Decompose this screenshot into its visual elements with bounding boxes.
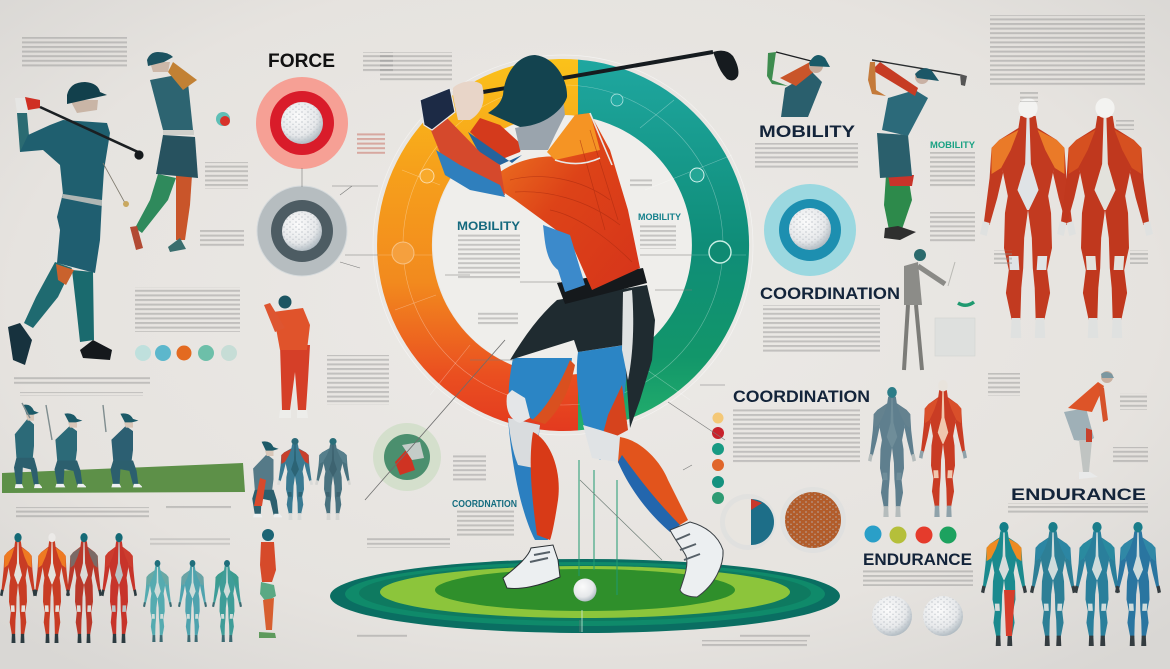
endurance figure two (1030, 522, 1076, 646)
heading: force: FORCE (268, 51, 335, 72)
legs (884, 175, 912, 235)
arm (264, 303, 285, 332)
rear arm blue muscle (468, 132, 522, 165)
second golfer top left (130, 52, 198, 252)
connector lines (302, 168, 725, 632)
head (150, 62, 170, 72)
club (872, 60, 960, 75)
muscle striations (510, 130, 632, 262)
white golf balls (872, 596, 963, 636)
club lines (22, 403, 106, 440)
anatomy back view right (1057, 98, 1153, 338)
heading: mobility: MOBILITY (759, 122, 856, 141)
mobility golfer two (868, 60, 967, 240)
hand (453, 81, 484, 120)
legs (280, 345, 310, 410)
right leg (577, 345, 688, 532)
head (809, 59, 823, 73)
cap (67, 82, 107, 104)
club head (713, 51, 738, 80)
figure four (101, 533, 137, 643)
ring arc: orange to red (377, 59, 578, 431)
golfer two (54, 413, 87, 487)
white glove (15, 98, 28, 113)
ring arc: teal to green (578, 60, 749, 430)
shorts (156, 135, 198, 178)
heading: endurance upper: ENDURANCE (1011, 485, 1146, 504)
head (70, 100, 98, 113)
head (278, 296, 292, 308)
abdominal muscles (543, 225, 585, 292)
green accent (958, 302, 974, 305)
arms (767, 52, 788, 86)
shoulder highlight (547, 113, 600, 160)
cap (915, 68, 939, 81)
textured brown ball (780, 487, 846, 553)
forearm (780, 62, 816, 86)
figure three (315, 438, 351, 520)
wrist wrap (420, 88, 455, 130)
alignment lines (579, 460, 662, 595)
club (483, 52, 713, 92)
label: mobility right: MOBILITY (930, 140, 975, 150)
red anatomy front figure (919, 380, 967, 517)
torso (882, 90, 928, 136)
ball marker (123, 201, 129, 207)
figure three (212, 560, 242, 642)
muscle accent (888, 175, 914, 186)
arm orange (868, 62, 886, 96)
shorts (877, 133, 912, 178)
right leg (176, 175, 192, 240)
belt (62, 193, 102, 206)
coordination dots (712, 412, 724, 504)
figure two (277, 438, 313, 520)
cap (914, 249, 926, 261)
mobility target blue (764, 184, 856, 276)
swing path (103, 163, 125, 203)
force target grey (257, 186, 347, 276)
figure two (34, 533, 70, 643)
cap (147, 52, 173, 66)
shoes (279, 410, 308, 418)
three golfers on turf (2, 403, 245, 493)
ring node left (392, 242, 414, 264)
white collar lines (555, 113, 612, 165)
central progress ring (373, 55, 753, 435)
torso (273, 308, 310, 350)
right shoe (168, 238, 186, 252)
torso (260, 542, 276, 582)
club (776, 52, 815, 62)
label: mobility ring: MOBILITY (638, 212, 681, 222)
large golfer follow through (8, 82, 144, 365)
cap (809, 55, 830, 67)
endurance figure multi-colour (981, 522, 1027, 646)
muscle accent (56, 264, 74, 285)
shoe (259, 632, 276, 638)
left leg (135, 174, 176, 233)
rear arm (470, 118, 522, 160)
head (1101, 371, 1113, 383)
figure three (66, 533, 102, 643)
club head (134, 150, 144, 160)
connector through target (365, 340, 505, 500)
ring node upper left (420, 169, 434, 183)
shoe laces (530, 534, 700, 562)
red bent golfer (264, 296, 310, 418)
heading: coordination lower: COORDINATION (733, 387, 870, 406)
figure two (178, 560, 207, 642)
left leg (24, 262, 72, 328)
golfer one (14, 405, 43, 488)
ring node right (709, 241, 731, 263)
anatomy row orange (0, 533, 137, 643)
headings (452, 122, 1146, 569)
shorts (260, 582, 276, 602)
grey figure (868, 387, 916, 517)
torso (904, 262, 922, 305)
right shoe (670, 522, 723, 597)
belt (557, 268, 647, 304)
skeleton golfer (904, 249, 955, 370)
red knee (1086, 428, 1092, 442)
ring node upper right (690, 168, 704, 182)
small red and teal icon (216, 112, 230, 126)
left leg (507, 358, 575, 540)
right leg (72, 270, 94, 342)
right bent golfer (1064, 371, 1114, 479)
club head (960, 74, 967, 86)
lower leg (1079, 440, 1092, 472)
shoe (1079, 472, 1098, 479)
endurance figure four (1115, 522, 1161, 646)
turf (2, 463, 245, 493)
neck and face (515, 97, 565, 150)
endurance figure three (1074, 522, 1120, 646)
rear arm (17, 113, 30, 152)
legs (904, 305, 922, 370)
club (948, 262, 955, 286)
torso (150, 73, 193, 130)
torso (20, 120, 110, 200)
torso (500, 113, 640, 290)
force target red (256, 77, 348, 169)
shirt (1068, 382, 1104, 412)
shorts (510, 285, 655, 428)
colour key dots (864, 526, 956, 544)
leg (1064, 408, 1094, 442)
heading: coordination upper: COORDINATION (760, 284, 900, 303)
shoes (884, 226, 916, 240)
club (40, 107, 138, 152)
anatomy row teal (143, 560, 242, 642)
heading: endurance lower: ENDURANCE (863, 550, 972, 569)
cap (488, 55, 567, 127)
left shoe (130, 226, 143, 250)
golf ball on green (574, 578, 596, 602)
golf green platform (330, 559, 840, 633)
arms (918, 266, 945, 284)
label: mobility centre: MOBILITY (457, 219, 520, 233)
ring node top (611, 94, 623, 106)
arm (1098, 384, 1108, 422)
split ball (720, 494, 776, 550)
side standing figure (259, 529, 276, 638)
trio of figures (252, 438, 351, 520)
skeleton golfer chart panel (935, 318, 975, 356)
red leg accent (1004, 590, 1015, 636)
coordination target green (373, 423, 441, 491)
shorts (57, 193, 102, 273)
red glove (25, 97, 40, 110)
ring inner field (433, 115, 693, 375)
arm (168, 62, 197, 90)
figure one (252, 441, 283, 517)
red accent (254, 478, 266, 506)
small icon row (135, 345, 237, 361)
left shoe (503, 545, 560, 589)
mobility golfer one (767, 52, 830, 117)
cap (1101, 372, 1114, 378)
right shoe (80, 340, 112, 360)
golfer three (110, 413, 143, 487)
anatomy back view left (980, 98, 1076, 338)
central golfer with muscle anatomy (420, 51, 738, 597)
head (915, 70, 929, 84)
belt (163, 130, 194, 135)
label: coordination centre: COORDNATION (452, 498, 517, 510)
forearm blue muscle (436, 150, 505, 197)
left shoe (8, 323, 32, 365)
shorts side stripe (622, 290, 633, 380)
cap (262, 529, 274, 541)
legs (263, 598, 274, 630)
torso (781, 72, 822, 117)
arm red (872, 62, 918, 96)
forearm (430, 118, 505, 195)
